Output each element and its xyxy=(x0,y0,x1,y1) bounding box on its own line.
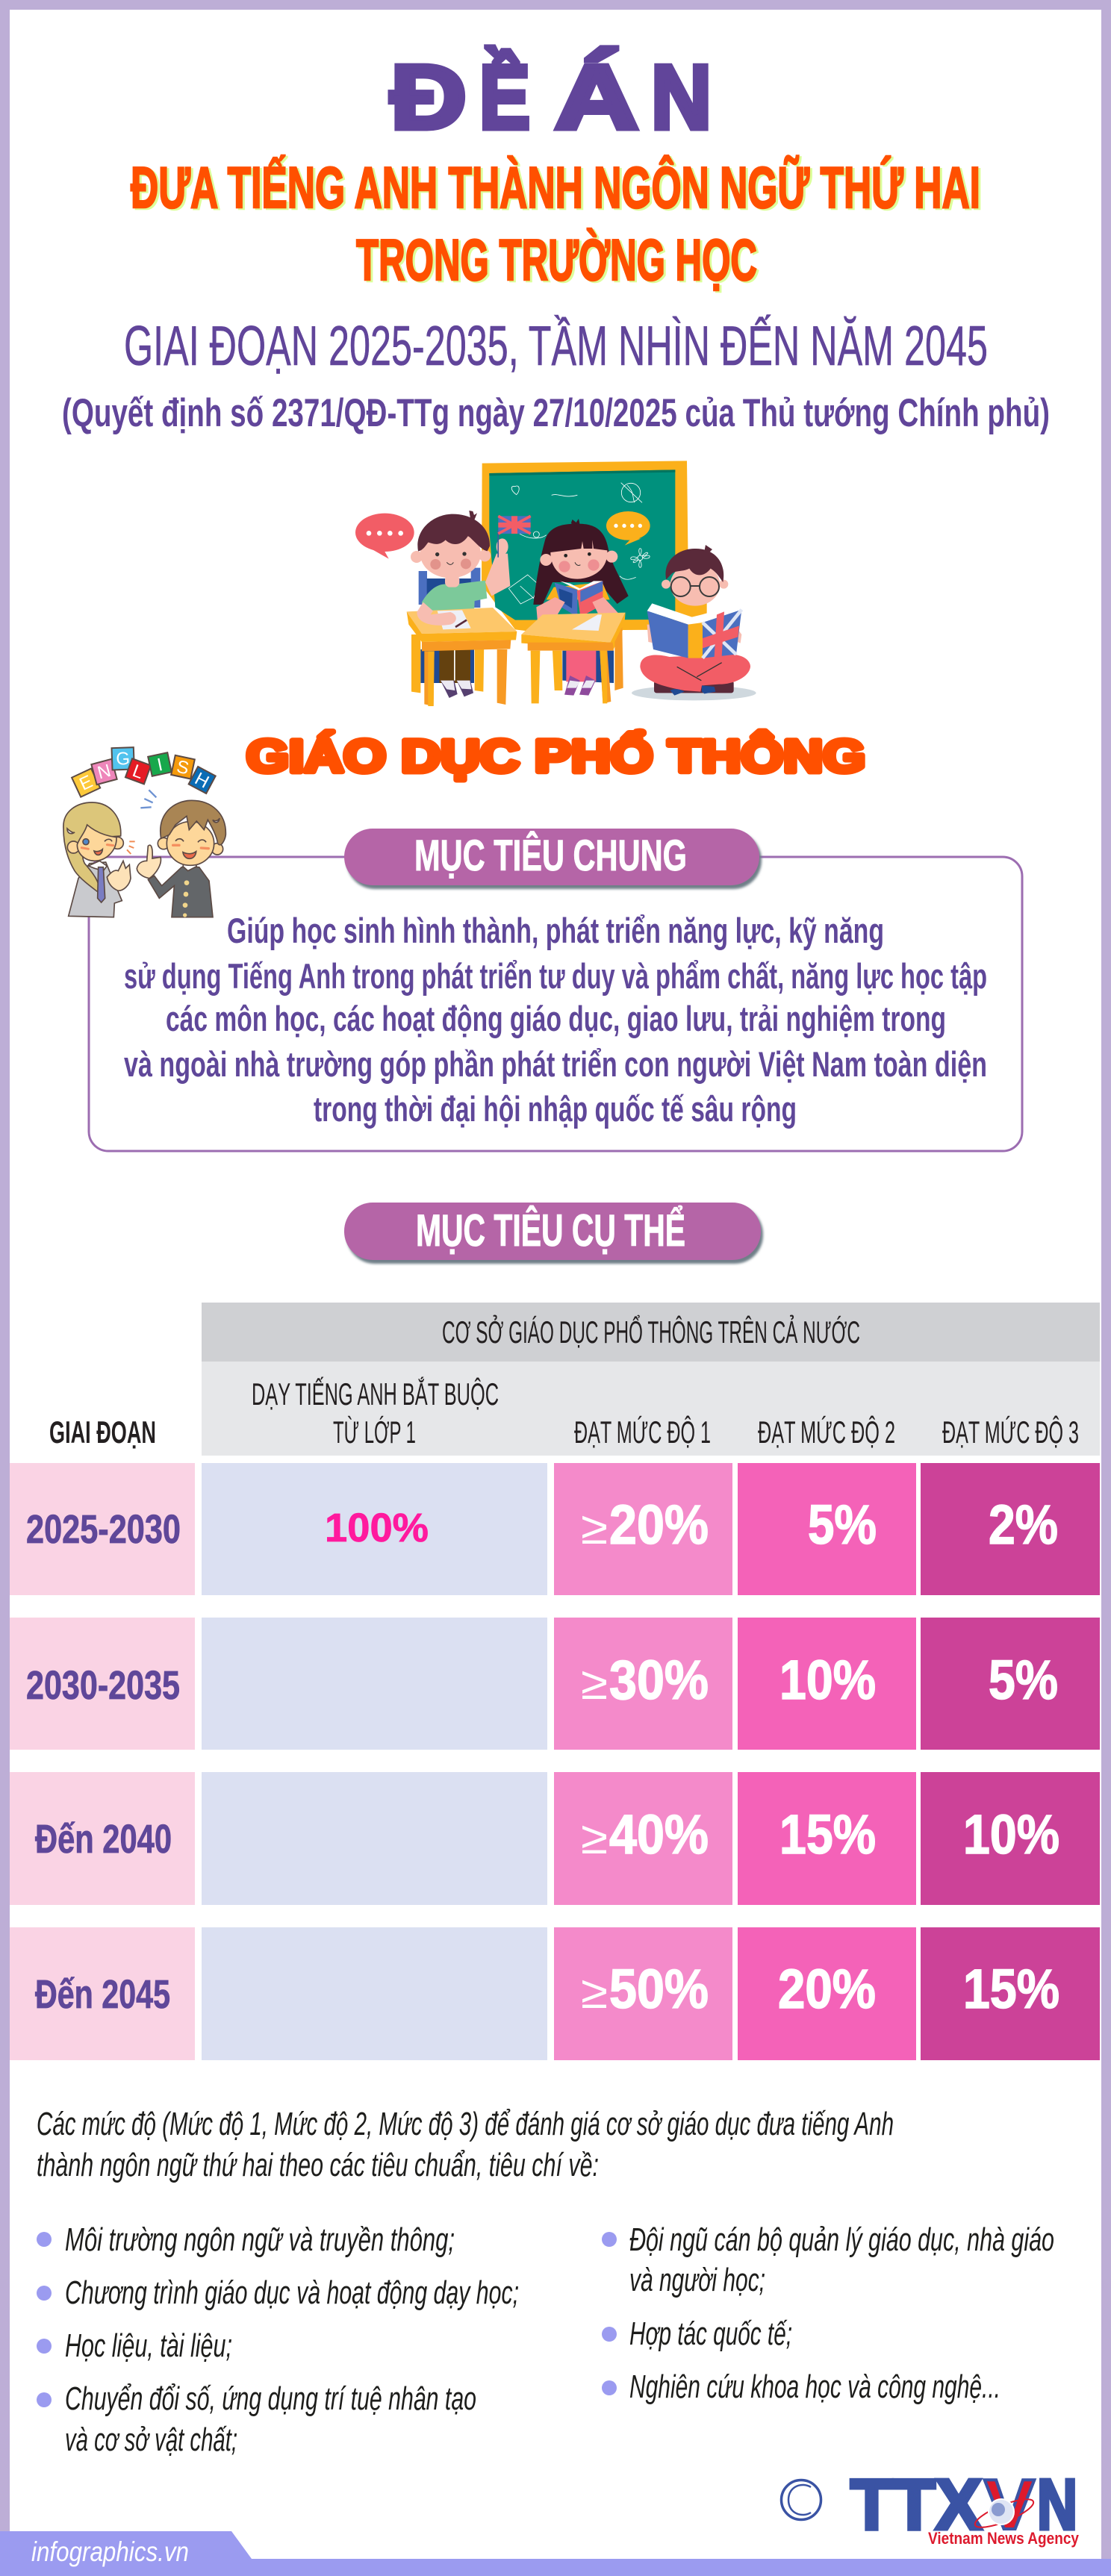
boy at desk xyxy=(419,571,427,605)
criteria list: left column: Chuyển đổi số, ứng dụng trí tuệ nhân tạo xyxy=(65,2380,476,2417)
logo: copyright symbol xyxy=(781,2480,821,2520)
logo: TTXVN: TTX xyxy=(850,2465,982,2545)
illustration: English kids xyxy=(63,747,225,917)
table header: GIAI ĐOẠN xyxy=(49,1415,156,1450)
body text xyxy=(124,911,987,1129)
table: specific targets xyxy=(10,1303,1100,2060)
pill: mục tiêu chung: MỤC TIÊU CHUNG xyxy=(414,832,687,880)
boy reading xyxy=(632,685,756,700)
title: ĐỀ ÁN: N xyxy=(651,46,712,148)
table header: DẠY TIẾNG ANH BẮT BUỘC xyxy=(252,1376,499,1412)
title line: đưa tiếng Anh: TRONG TRƯỜNG HỌC xyxy=(356,227,757,293)
row: 2030-2035: 5% xyxy=(989,1649,1058,1711)
illustration: classroom children xyxy=(355,461,756,706)
table header: ĐẠT MỨC ĐỘ 1 xyxy=(574,1415,711,1450)
logo: TTXVN: Vietnam News Agency xyxy=(928,2529,1080,2548)
panel: mục tiêu chung xyxy=(63,747,1022,1151)
table header: ĐẠT MỨC ĐỘ 2 xyxy=(758,1415,895,1450)
footer band xyxy=(0,2531,1111,2576)
illustration: English kids: H xyxy=(191,769,212,793)
note text: criteria introduction xyxy=(37,2106,894,2183)
note text: criteria introduction: thành ngôn ngữ thứ hai theo các tiêu chuẩn, tiêu chí về: xyxy=(37,2147,599,2183)
illustration: English kids: G xyxy=(116,749,130,770)
title line: đưa tiếng Anh: TRONG TRƯỜNG HỌC xyxy=(358,228,759,294)
row: 2025-2030: 2% xyxy=(989,1494,1058,1556)
row: 2030-2035: 2030-2035 xyxy=(26,1663,180,1708)
title line: đưa tiếng Anh xyxy=(131,155,983,294)
criteria list: left column: Môi trường ngôn ngữ và truyền thông; xyxy=(65,2221,455,2258)
title: ĐỀ ÁN: Á xyxy=(555,46,638,148)
criteria list: left column: Chương trình giáo dục và hoạt động dạy học; xyxy=(65,2274,519,2311)
illustration: English kids: L xyxy=(130,761,146,783)
footer: infographics.vn: infographics.vn xyxy=(31,2536,189,2567)
body text: trong thời đại hội nhập quốc tế sâu rộng xyxy=(314,1089,797,1129)
row: 2025-2030: 2025-2030 xyxy=(26,1507,181,1552)
criteria list: right column xyxy=(602,2221,1054,2405)
criteria list: left column: Học liệu, tài liệu; xyxy=(65,2327,232,2364)
girl at desk xyxy=(562,651,614,683)
row: đến 2045: 20% xyxy=(778,1958,876,2020)
table header: TỪ LỚP 1 xyxy=(333,1415,416,1450)
illustration: English kids: I xyxy=(155,755,164,776)
row: đến 2045: 15% xyxy=(963,1958,1059,2020)
row: đến 2045 xyxy=(10,1927,1100,2060)
row: 2025-2030: ≥ xyxy=(581,1503,608,1554)
criteria list: left column xyxy=(37,2221,519,2458)
logo: TTXVN: V xyxy=(984,2465,1035,2545)
illustration: English kids: E xyxy=(76,771,96,795)
girl xyxy=(63,802,131,917)
row: 2030-2035: ≥ xyxy=(581,1658,608,1709)
pill: mục tiêu cụ thể: MỤC TIÊU CỤ THỂ xyxy=(416,1206,685,1256)
pill: mục tiêu cụ thể xyxy=(344,1203,763,1264)
title: ĐỀ ÁN: Đ xyxy=(390,46,467,148)
row: đến 2040: 40% xyxy=(609,1803,709,1865)
row: 2025-2030: 20% xyxy=(609,1494,709,1556)
row: đến 2045: Đến 2045 xyxy=(35,1972,170,2017)
row: 2025-2030: 100% xyxy=(325,1506,429,1550)
row: đến 2040: 10% xyxy=(963,1803,1059,1865)
illustration: English kids: S xyxy=(175,757,190,779)
pill: mục tiêu chung xyxy=(344,829,762,889)
row: đến 2040: ≥ xyxy=(581,1812,608,1864)
criteria list: left column: và cơ sở vật chất; xyxy=(65,2421,237,2458)
title: ĐỀ ÁN xyxy=(390,46,712,148)
row: 2030-2035: 30% xyxy=(609,1649,709,1711)
box outline xyxy=(89,857,1022,1151)
row: 2025-2030 xyxy=(10,1463,1100,1595)
row: 2025-2030: 5% xyxy=(808,1494,877,1556)
title: ĐỀ ÁN: Ề xyxy=(479,46,530,148)
criteria list: right column: và người học; xyxy=(629,2262,765,2298)
row: đến 2045: ≥ xyxy=(581,1967,608,2018)
logo: TTXVN xyxy=(850,2465,1080,2548)
boy xyxy=(137,800,225,917)
row: 2030-2035: 10% xyxy=(779,1649,876,1711)
row: đến 2040: 15% xyxy=(779,1803,876,1865)
desk left xyxy=(411,634,484,693)
criteria list: right column: Hợp tác quốc tế; xyxy=(629,2315,792,2352)
illustration: English kids: N xyxy=(96,761,113,783)
row: 2030-2035 xyxy=(10,1618,1100,1750)
table header xyxy=(49,1303,1100,1456)
logo: TTXVN: N xyxy=(1037,2465,1077,2545)
row: đến 2040: Đến 2040 xyxy=(35,1817,172,1862)
heading: giáo dục phổ thông: GIÁO DỤC PHỔ THÔNG xyxy=(246,730,865,782)
row: đến 2045: 50% xyxy=(609,1958,709,2020)
row: đến 2040 xyxy=(10,1772,1100,1905)
